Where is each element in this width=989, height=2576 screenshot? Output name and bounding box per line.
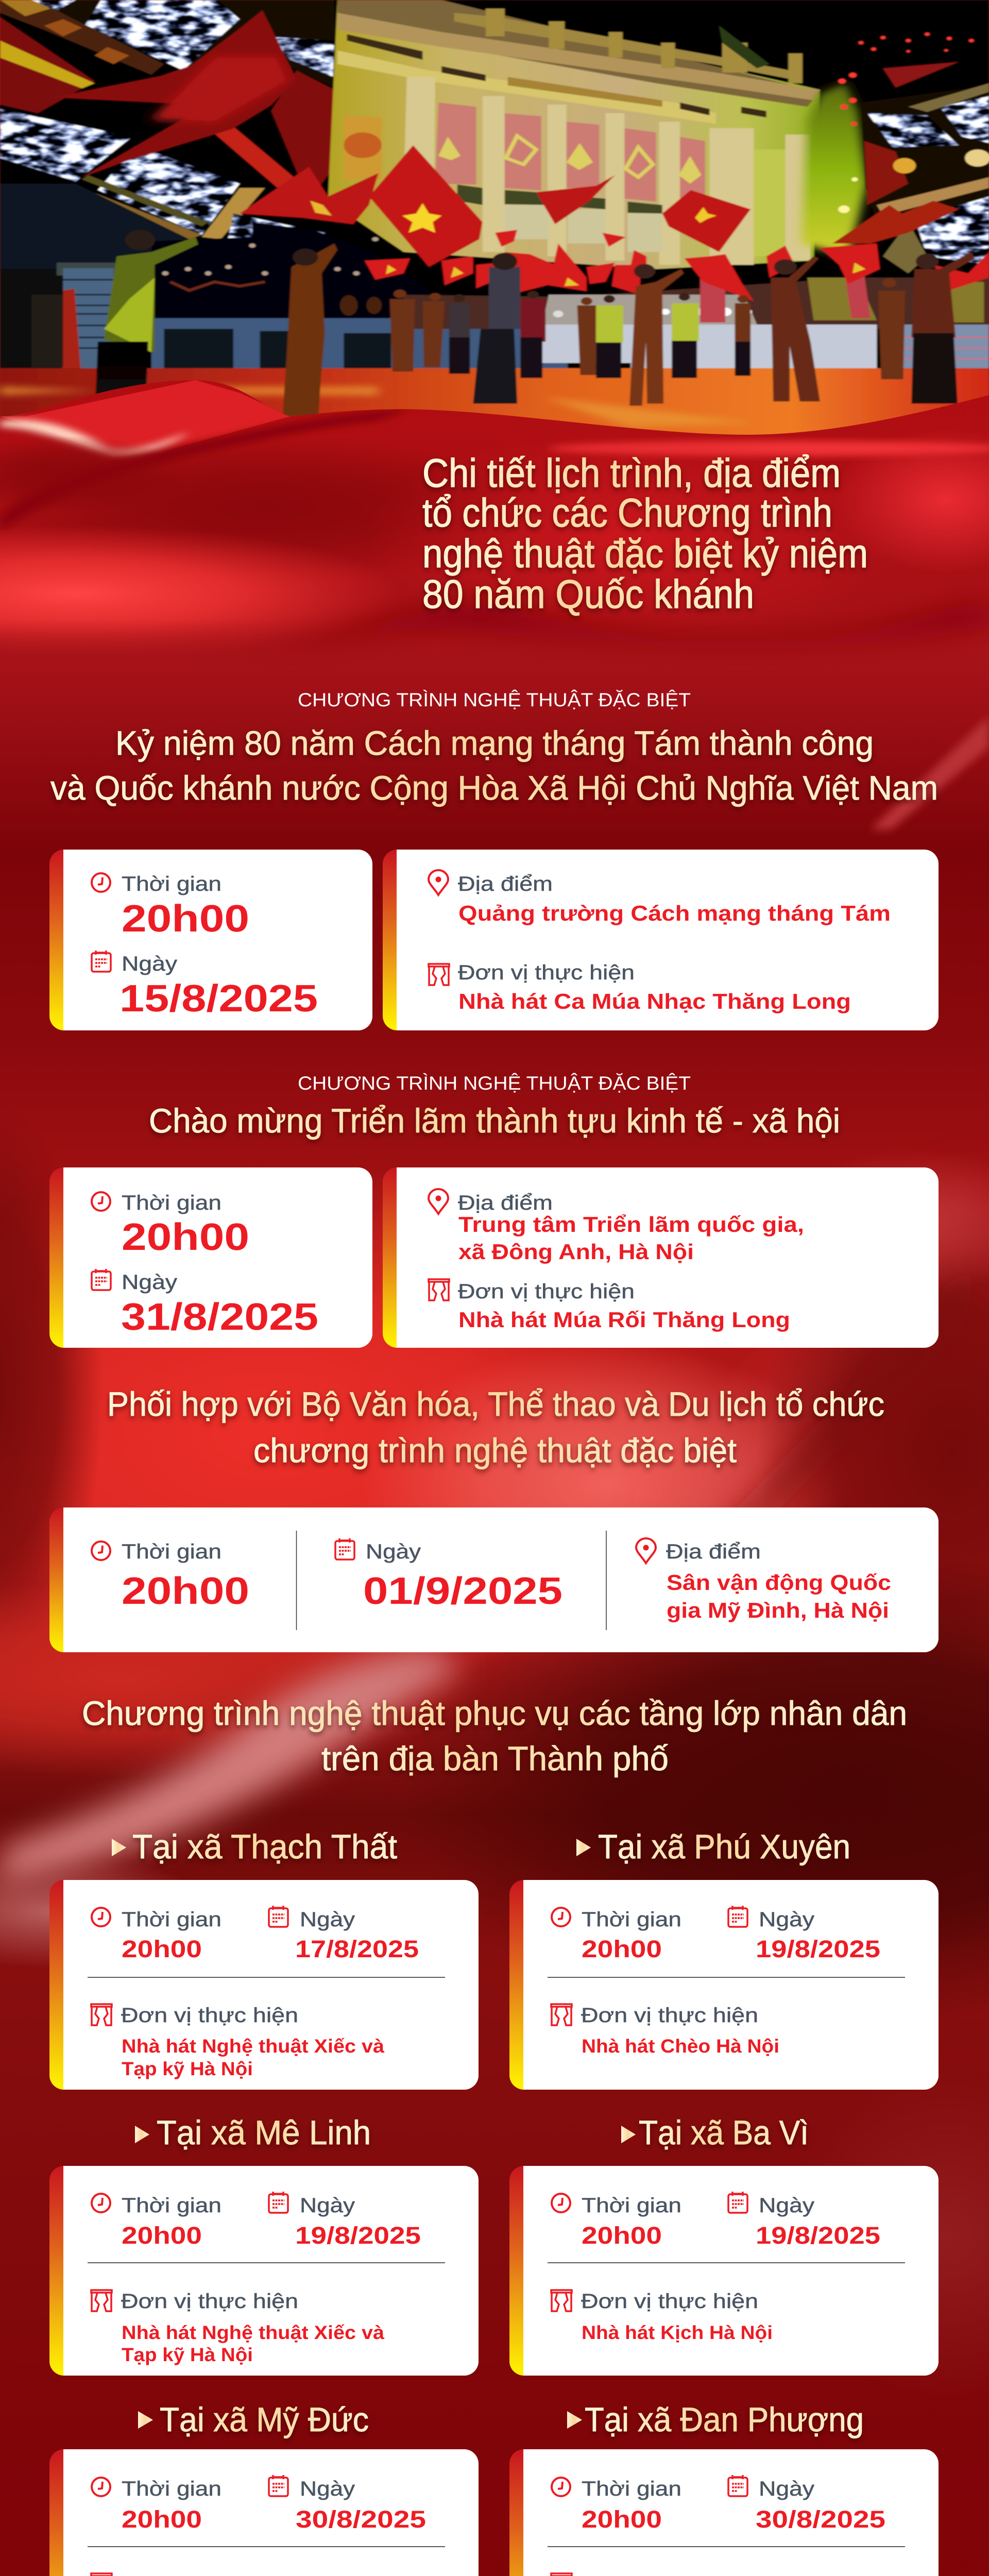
time value: 20h00 — [582, 2222, 662, 2249]
heading: community programs — [82, 1694, 907, 1777]
time label: Thời gian — [122, 873, 221, 895]
icon: pin — [636, 1538, 656, 1563]
performer label: Đơn vị thực hiện — [121, 2004, 298, 2027]
time value: 20h00 — [122, 2505, 202, 2533]
title: 80 năm Quốc khánh — [422, 571, 754, 617]
performer value: Nhà hát Múa Rối Thăng Long — [458, 1308, 790, 1332]
heading: Ba Vì: Tại xã Ba Vì — [639, 2113, 809, 2151]
time label: Thời gian — [582, 2478, 681, 2500]
heading: Mê Linh: Tại xã Mê Linh — [157, 2113, 371, 2151]
panel: venue and performer, program 2 — [383, 1167, 939, 1348]
performer value: Nhà hát Ca Múa Nhạc Thăng Long — [458, 989, 851, 1013]
performer value: Nhà hát Chèo Hà Nội — [582, 2036, 779, 2057]
time value: 20h00 — [582, 1935, 662, 1962]
heading: Đan Phượng: Tại xã Đan Phượng — [585, 2400, 864, 2438]
heading: program 2 — [149, 1073, 840, 1140]
title — [422, 450, 868, 617]
time value: 20h00 — [122, 1935, 202, 1962]
heading: Mỹ Đức: Tại xã Mỹ Đức — [160, 2400, 369, 2438]
date label: Ngày — [759, 2478, 814, 2500]
date value: 19/8/2025 — [295, 2222, 421, 2249]
panel: Mỹ Đức — [49, 2449, 479, 2576]
panel: time and date, program 2 — [49, 1167, 372, 1348]
time value: 20h00 — [122, 1215, 249, 1258]
title: Chi tiết lịch trình, địa điểm — [422, 450, 841, 496]
time label: Thời gian — [582, 2194, 681, 2217]
date value: 31/8/2025 — [121, 1295, 318, 1338]
performer label: Đơn vị thực hiện — [121, 2290, 298, 2313]
orchestra and stage left — [0, 222, 568, 371]
venue value — [667, 1570, 891, 1622]
icon: curtain — [429, 964, 449, 985]
right film screens — [861, 62, 989, 274]
venue label: Địa điểm — [458, 1192, 553, 1214]
performer label: Đơn vị thực hiện — [581, 2004, 758, 2027]
time value: 20h00 — [122, 897, 249, 940]
icon: calendar — [269, 2475, 288, 2496]
date label: Ngày — [366, 1540, 421, 1563]
icon: calendar — [728, 2475, 747, 2496]
heading: community programs: trên địa bàn Thành phố — [321, 1739, 669, 1777]
heading: program 3: Phối hợp với Bộ Văn hóa, Thể thao và Du lịch tổ chức — [107, 1385, 884, 1423]
icon: curtain — [551, 2004, 572, 2025]
heading: program 1 — [50, 689, 938, 807]
stage floor — [0, 368, 989, 440]
heading: community programs: Chương trình nghệ thuật phục vụ các tầng lớp nhân dân — [82, 1694, 907, 1732]
icon: calendar — [269, 2192, 288, 2213]
heading: Thạch Thất: Tại xã Thạch Thất — [132, 1827, 397, 1866]
date label: Ngày — [759, 1908, 814, 1931]
foreground performers — [95, 230, 975, 421]
icon: curtain — [91, 2290, 112, 2311]
icon: clock — [92, 2194, 110, 2212]
icon: pin — [429, 1189, 448, 1214]
date label: Ngày — [300, 2194, 355, 2217]
icon: clock — [92, 873, 110, 892]
time label: Thời gian — [122, 1192, 221, 1214]
icon: calendar — [335, 1538, 354, 1560]
date label: Ngày — [300, 2478, 355, 2500]
icon: clock — [552, 2478, 570, 2496]
venue value — [458, 1212, 804, 1264]
date label: Ngày — [759, 2194, 814, 2217]
big red flag — [53, 10, 297, 177]
time label: Thời gian — [122, 1540, 221, 1563]
venue value: Sân vận động Quốc — [667, 1570, 891, 1595]
stage lights — [838, 32, 974, 213]
panel: Mê Linh — [49, 2166, 479, 2376]
stage back right — [404, 274, 989, 369]
performer label: Đơn vị thực hiện — [458, 961, 635, 984]
small flags cluster — [365, 230, 989, 301]
icon: calendar — [92, 951, 111, 972]
icon: clock — [92, 1541, 110, 1560]
performer value — [122, 2322, 384, 2365]
red satin ribbon — [0, 380, 989, 650]
icon: curtain — [91, 2573, 112, 2576]
film screens left — [0, 0, 334, 299]
panel: Thạch Thất — [49, 1880, 479, 2090]
icon: clock — [552, 2194, 570, 2212]
venue label: Địa điểm — [458, 873, 553, 895]
time label: Thời gian — [122, 2478, 221, 2500]
time label: Thời gian — [122, 1908, 221, 1931]
date label: Ngày — [122, 1271, 177, 1294]
background performers — [390, 278, 905, 379]
icon: clock — [92, 1908, 110, 1926]
icon: curtain — [551, 2290, 572, 2311]
opera house facade — [328, 0, 820, 269]
date value: 30/8/2025 — [296, 2505, 426, 2533]
heading: Phú Xuyên: Tại xã Phú Xuyên — [598, 1827, 850, 1866]
title: tổ chức các Chương trình — [422, 490, 832, 535]
performer value — [122, 2036, 384, 2079]
panel: Đan Phượng — [509, 2449, 939, 2576]
icon: calendar — [728, 1906, 747, 1927]
icon: clock — [92, 1192, 110, 1211]
icon: curtain — [429, 1279, 449, 1300]
time value: 20h00 — [582, 2505, 662, 2533]
performer value: Tạp kỹ Hà Nội — [122, 2058, 253, 2079]
venue value: Trung tâm Triển lãm quốc gia, — [458, 1212, 804, 1236]
time label: Thời gian — [582, 1908, 681, 1931]
venue value: gia Mỹ Đình, Hà Nội — [667, 1598, 889, 1622]
performer value: Nhà hát Kịch Hà Nội — [582, 2322, 773, 2343]
date value: 30/8/2025 — [756, 2505, 885, 2533]
heading: program 2: Chào mừng Triển lãm thành tựu kinh tế - xã hội — [149, 1101, 840, 1140]
date label: Ngày — [300, 1908, 355, 1931]
icon: calendar — [269, 1906, 288, 1927]
heading: program 1: CHƯƠNG TRÌNH NGHỆ THUẬT ĐẶC BIỆT — [298, 689, 691, 710]
venue label: Địa điểm — [666, 1540, 761, 1563]
heading: program 3 — [107, 1385, 884, 1469]
icon: calendar — [92, 1269, 111, 1290]
waving flags — [82, 145, 959, 267]
icon: clock — [552, 1908, 570, 1926]
time label: Thời gian — [122, 2194, 221, 2217]
title: nghệ thuật đặc biệt kỷ niệm — [422, 531, 868, 576]
date value: 01/9/2025 — [363, 1569, 562, 1612]
panel: venue and performer, program 1 — [383, 850, 939, 1030]
performer value: Tạp kỹ Hà Nội — [122, 2344, 253, 2365]
heading: program 3: chương trình nghệ thuật đặc biệt — [253, 1431, 737, 1469]
icon: curtain — [551, 2573, 572, 2576]
performer value: Nhà hát Nghệ thuật Xiếc và — [122, 2036, 384, 2057]
performer value: Nhà hát Nghệ thuật Xiếc và — [122, 2322, 384, 2343]
time value: 20h00 — [122, 2222, 202, 2249]
hero photo: stage and opera house — [0, 0, 989, 670]
date value: 15/8/2025 — [120, 977, 318, 1020]
icon: pin — [429, 870, 448, 895]
icon: clock — [92, 2478, 110, 2496]
panel: program 3 details — [49, 1507, 939, 1652]
heading: program 1: Kỷ niệm 80 năm Cách mạng tháng Tám thành công — [115, 724, 874, 762]
icon: calendar — [728, 2192, 747, 2213]
panel: Ba Vì — [509, 2166, 939, 2376]
venue value: Quảng trường Cách mạng tháng Tám — [458, 901, 891, 925]
date value: 19/8/2025 — [756, 1935, 880, 1962]
panel: Phú Xuyên — [509, 1880, 939, 2090]
venue value: xã Đông Anh, Hà Nội — [458, 1240, 694, 1264]
green stage light — [801, 83, 867, 256]
date value: 17/8/2025 — [295, 1935, 419, 1962]
date value: 19/8/2025 — [756, 2222, 880, 2249]
panel: time and date, program 1 — [49, 850, 372, 1030]
performer label: Đơn vị thực hiện — [581, 2290, 758, 2313]
heading: program 2: CHƯƠNG TRÌNH NGHỆ THUẬT ĐẶC BIỆT — [298, 1073, 691, 1094]
time value: 20h00 — [122, 1569, 249, 1612]
icon: curtain — [91, 2004, 112, 2025]
date label: Ngày — [122, 953, 177, 975]
performer label: Đơn vị thực hiện — [458, 1280, 635, 1303]
heading: program 1: và Quốc khánh nước Cộng Hòa Xã Hội Chủ Nghĩa Việt Nam — [50, 769, 938, 807]
